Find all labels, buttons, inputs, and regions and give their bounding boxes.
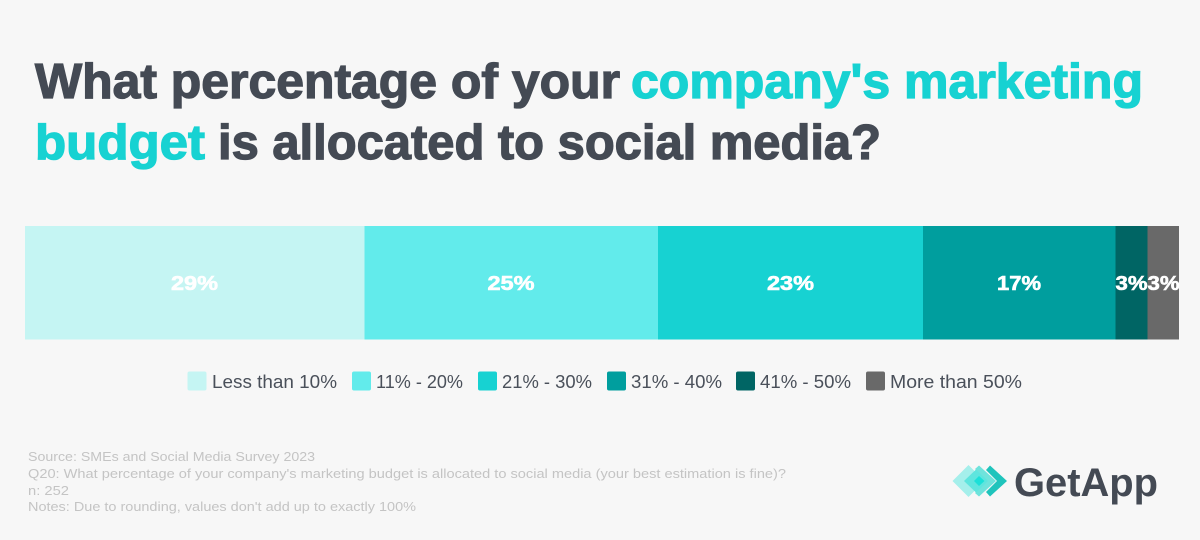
segment: 31% - 40% xyxy=(923,226,1116,340)
segment: 41% - 50%: 3% xyxy=(1116,273,1148,295)
legend item: 31% - 40%: 31% - 40% xyxy=(631,372,722,392)
segment: 21% - 30% xyxy=(658,226,923,340)
legend item: 11% - 20%: 11% - 20% xyxy=(376,372,463,392)
segment: 11% - 20% xyxy=(364,226,658,340)
legend item: 21% - 30%: 21% - 30% xyxy=(502,372,592,392)
title: What percentage of your xyxy=(35,55,620,109)
segment: less than 10% xyxy=(25,226,364,340)
source notes: Notes: Due to rounding, values don't add up to exactly 100% xyxy=(28,499,416,514)
stacked bar chart xyxy=(25,226,1180,340)
source notes xyxy=(28,449,786,514)
segment: more than 50% xyxy=(1148,226,1180,340)
segment: 41% - 50% xyxy=(1116,226,1148,340)
segment: 11% - 20%: 25% xyxy=(488,273,535,295)
title xyxy=(35,55,1143,170)
segment: less than 10%: 29% xyxy=(171,273,218,295)
icon: GetApp chevrons xyxy=(952,465,1007,497)
segment: 21% - 30%: 23% xyxy=(767,273,814,295)
title: is allocated to social media? xyxy=(218,116,881,170)
legend item: more than 50%: More than 50% xyxy=(890,372,1022,392)
title: budget xyxy=(35,116,205,170)
legend xyxy=(188,372,1022,392)
source notes: Q20: What percentage of your company's marketing budget is allocated to social media (your best estimation is fine)? xyxy=(28,466,786,481)
source notes: n: 252 xyxy=(28,483,69,498)
title: company's marketing xyxy=(631,55,1143,109)
legend item: less than 10%: Less than 10% xyxy=(212,372,337,392)
source notes: Source: SMEs and Social Media Survey 2023 xyxy=(28,449,315,464)
logo: GetApp xyxy=(952,461,1158,505)
segment: 31% - 40%: 17% xyxy=(997,273,1041,295)
segment: more than 50%: 3% xyxy=(1148,273,1180,295)
logo wordmark: GetApp xyxy=(1014,461,1158,505)
legend item: 41% - 50%: 41% - 50% xyxy=(760,372,851,392)
